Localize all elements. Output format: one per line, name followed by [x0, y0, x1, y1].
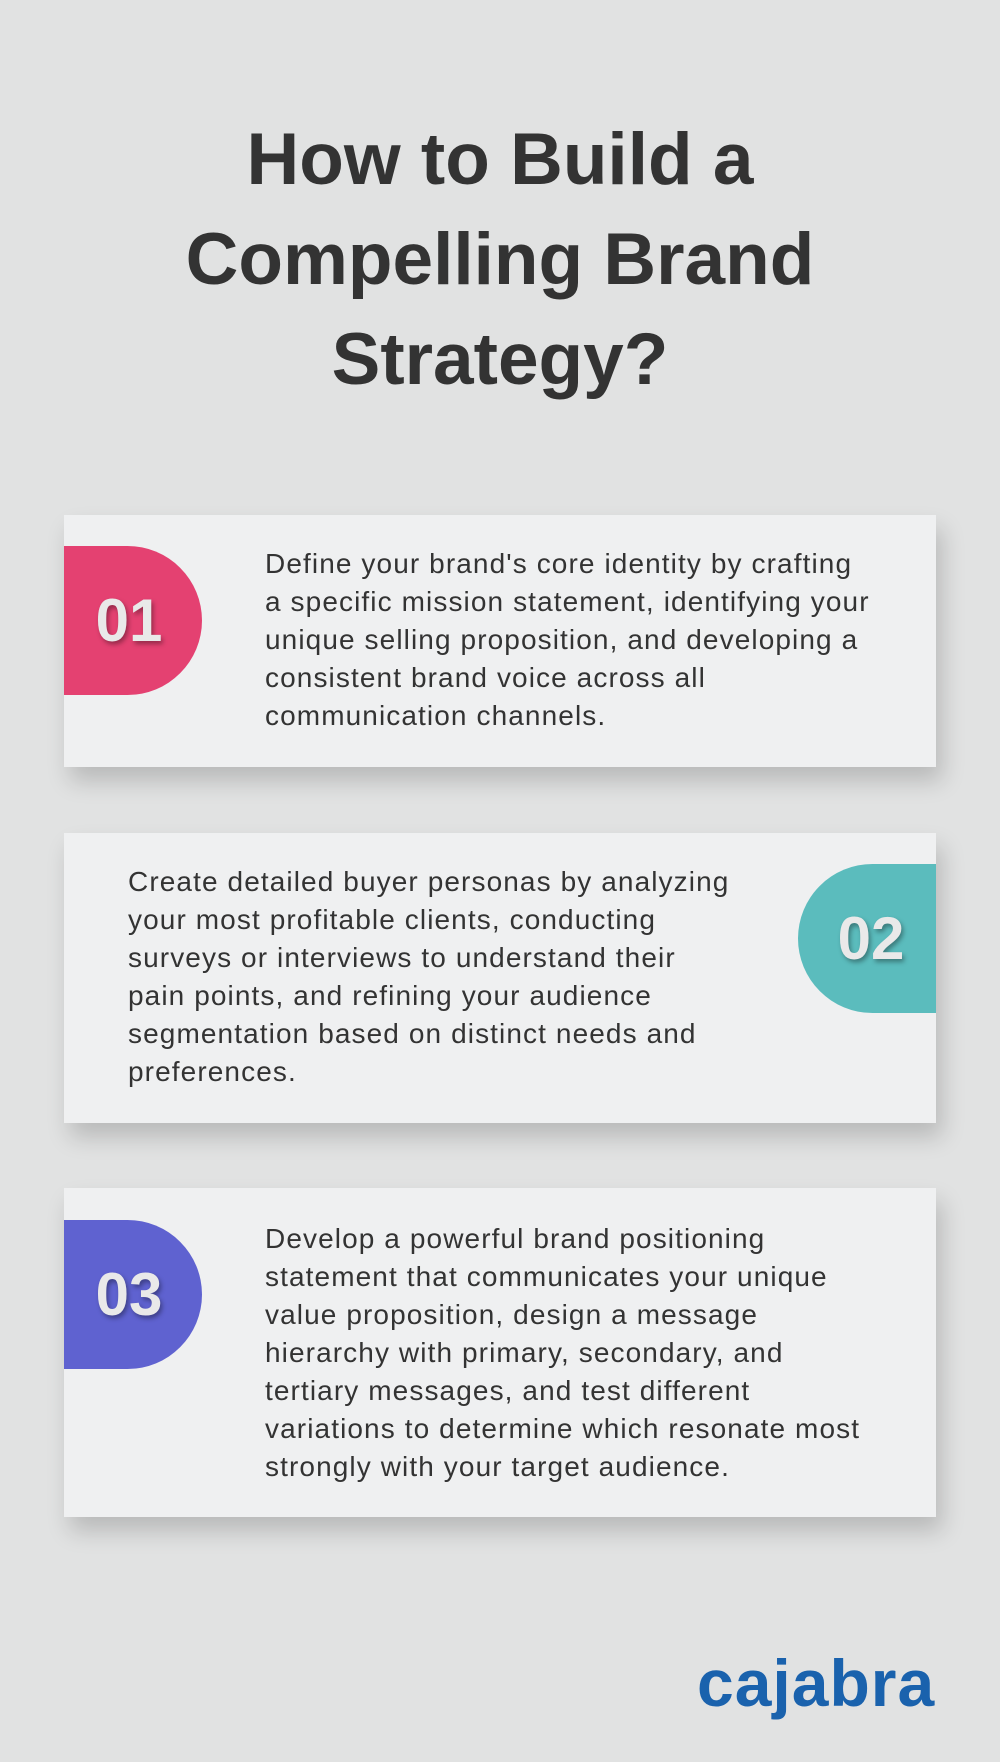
title: Compelling Brand: [186, 219, 814, 300]
panel: step 1: [64, 515, 936, 767]
badge 01: [64, 546, 202, 695]
badge 02: [798, 864, 936, 1013]
text step 2: Create detailed buyer personas by analyzing your most profitable clients, conducting surveys or interviews to understand their pain points, and refining your audience segmentation based on distinct needs and preferences.: [128, 866, 729, 1087]
title: Strategy?: [332, 319, 668, 400]
panel: step 3: [64, 1188, 936, 1517]
badge 02: 02: [838, 905, 904, 972]
badge 03: [64, 1220, 202, 1369]
panel: step 2: [64, 833, 936, 1123]
title: How to Build a: [247, 119, 753, 200]
text step 3: Develop a powerful brand positioning statement that communicates your unique value proposition, design a message hierarchy with primary, secondary, and tertiary messages, and test different variations to determine which resonate most strongly with your target audience.: [265, 1223, 860, 1482]
badge 03: 03: [96, 1261, 162, 1328]
title: [186, 119, 814, 400]
badge 01: 01: [96, 587, 162, 654]
text step 1: Define your brand's core identity by crafting a specific mission statement, identifying your unique selling proposition, and developing a consistent brand voice across all communication channels.: [265, 548, 870, 731]
logo: cajabra: [697, 1646, 935, 1720]
